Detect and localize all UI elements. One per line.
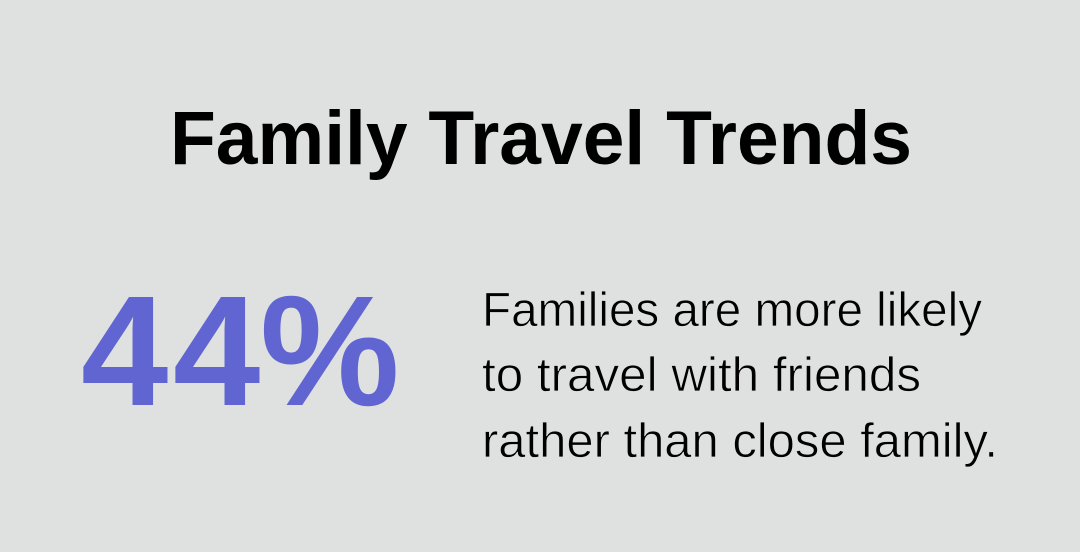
description text: rather than close family.: [482, 415, 998, 468]
description text: Families are more likely: [482, 284, 982, 337]
description text: [482, 284, 998, 468]
title: Family Travel Trends: [170, 96, 912, 181]
statistic: 44%: 44%: [81, 264, 400, 439]
description text: to travel with friends: [482, 349, 921, 402]
